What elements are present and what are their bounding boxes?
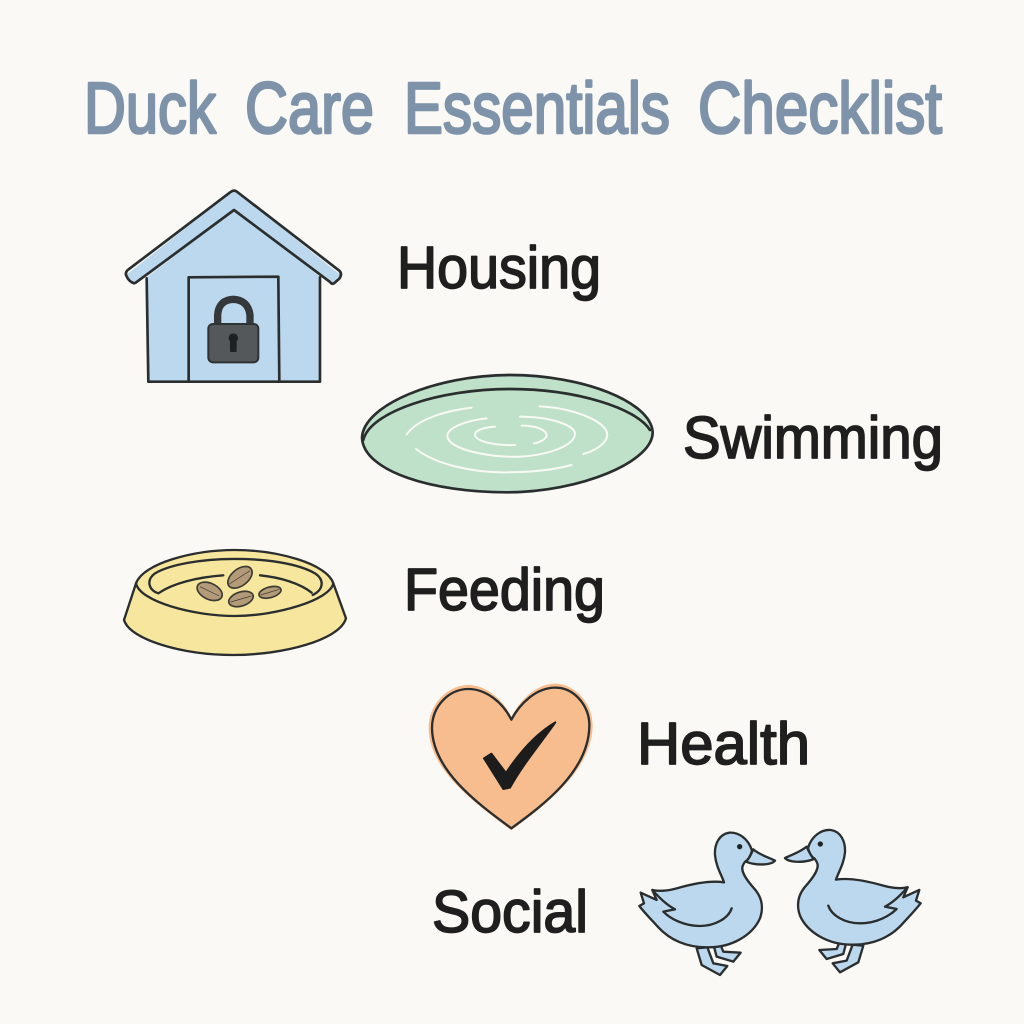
title <box>84 69 942 149</box>
icon: swimming pond <box>362 375 653 492</box>
label: Social: Social <box>432 879 588 945</box>
title: Checklist <box>698 69 942 149</box>
icon: feed bowl with seeds <box>124 550 346 655</box>
title: Duck <box>84 69 217 149</box>
icon: house with padlock <box>126 190 341 382</box>
title: Care <box>245 69 374 149</box>
title: Essentials <box>404 69 670 149</box>
label: Housing: Housing <box>397 235 601 301</box>
duck: right <box>785 830 921 972</box>
label: Health: Health <box>637 711 810 777</box>
label: Feeding: Feeding <box>404 557 605 623</box>
icon: heart with check <box>429 684 593 830</box>
icon: two ducks <box>639 830 921 975</box>
icon: padlock <box>208 299 258 362</box>
duck: left <box>639 833 775 975</box>
label: Swimming: Swimming <box>683 405 943 471</box>
seeds <box>194 562 282 610</box>
